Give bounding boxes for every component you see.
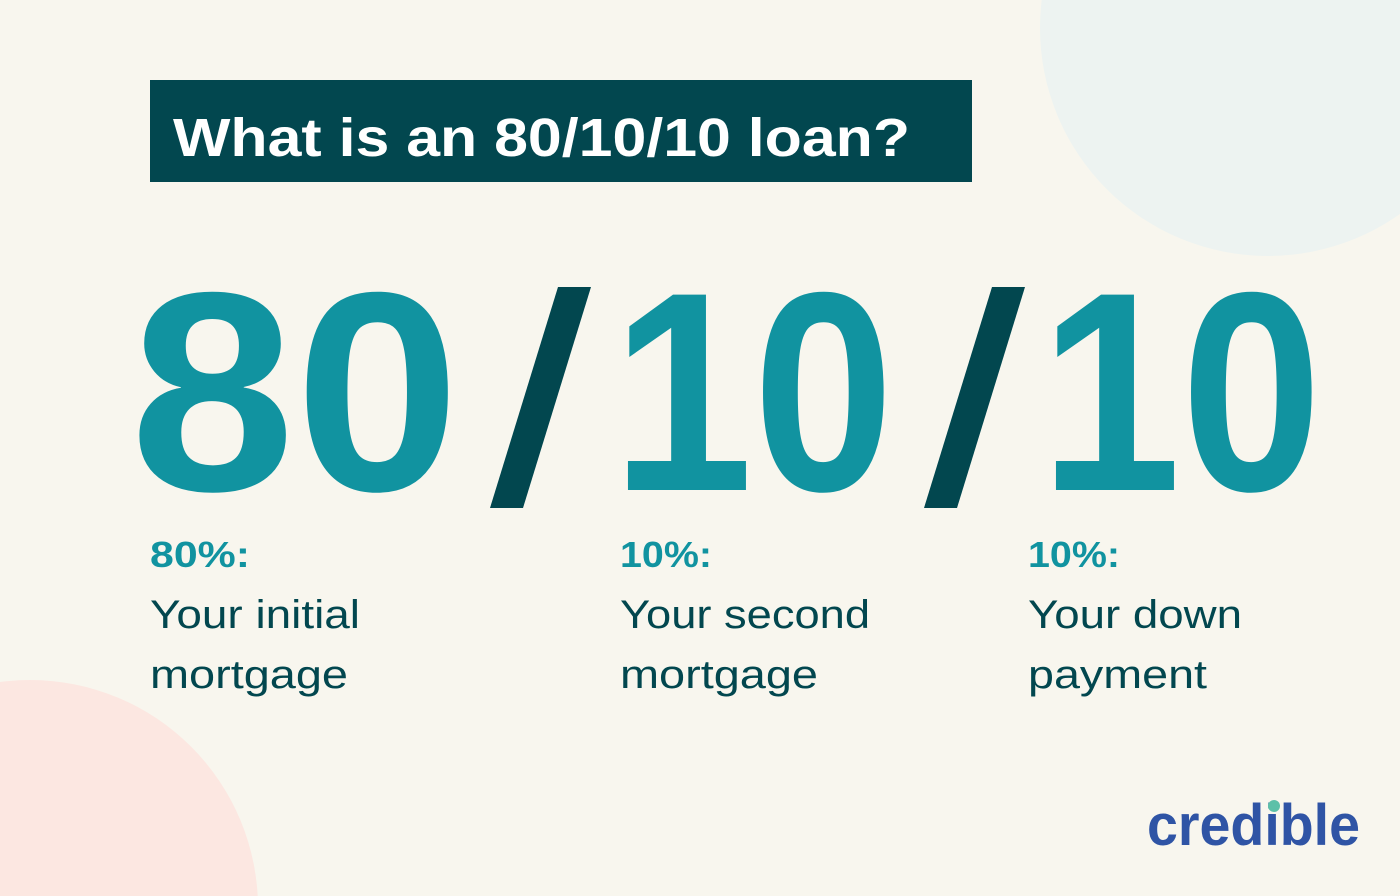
- label 10% second mortgage: 10%:: [620, 534, 712, 575]
- label 10% down payment: payment: [1028, 653, 1207, 697]
- label 80%: Your initial: [150, 593, 360, 637]
- label 10% down payment: Your down: [1028, 593, 1242, 637]
- big number 80: 80: [130, 234, 460, 551]
- decorative circle bottom left: [0, 680, 258, 896]
- logo: credible: credible: [1147, 793, 1360, 858]
- big number 10 second: 10: [1040, 234, 1322, 551]
- label 10% second mortgage: [620, 534, 870, 697]
- decorative circle top right: [1040, 0, 1400, 256]
- label 10% second mortgage: mortgage: [620, 653, 818, 697]
- big number 10 first: 10: [612, 234, 894, 551]
- label 10% second mortgage: Your second: [620, 593, 870, 637]
- slash 1: [490, 287, 591, 508]
- label 80%: [150, 534, 360, 697]
- title: [150, 80, 972, 182]
- slash 2: [924, 287, 1025, 508]
- label 10% down payment: [1028, 534, 1242, 697]
- label 80%: mortgage: [150, 653, 348, 697]
- title: What is an 80/10/10 loan?: [173, 108, 910, 168]
- label 80%: 80%:: [150, 534, 250, 575]
- label 10% down payment: 10%:: [1028, 534, 1120, 575]
